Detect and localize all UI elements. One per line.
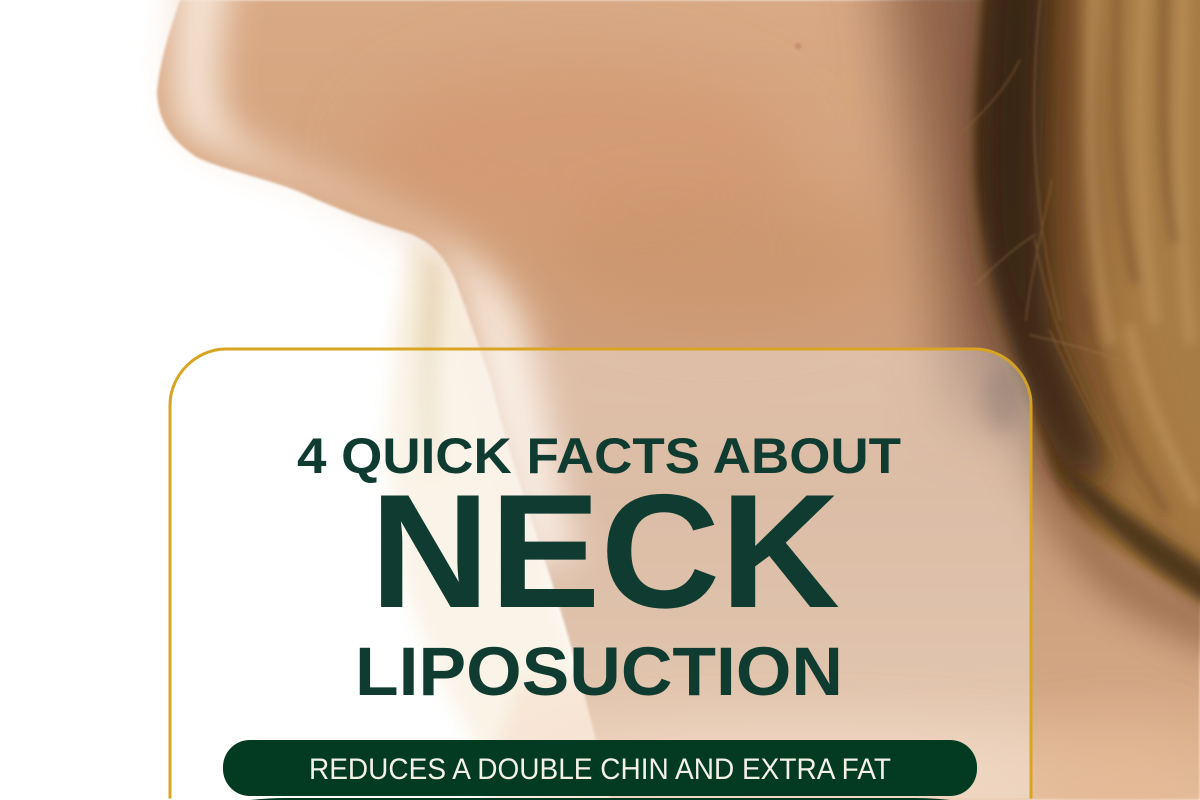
hair mass <box>975 0 1200 625</box>
panel background and gold border <box>170 349 1031 798</box>
lit jaw edge <box>172 0 575 560</box>
fact pill: reduces a double chin <box>223 740 977 796</box>
hair strands soft <box>1063 0 1195 510</box>
small skin mark <box>795 43 801 49</box>
next fact pill, cropped <box>250 798 950 800</box>
heading: 4 quick facts about: 4 QUICK FACTS ABOUT <box>297 428 901 484</box>
hair strands fine <box>960 0 1170 530</box>
shadow under hair <box>1025 410 1200 640</box>
hair underside shadow <box>1050 455 1200 625</box>
dark hair root shading <box>983 0 1110 480</box>
heading: neck: NECK <box>370 461 840 642</box>
hair glow seen through panel <box>983 368 1023 432</box>
fact pill: reduces a double chin: REDUCES A DOUBLE CHIN AND EXTRA FAT <box>309 753 891 786</box>
heading: liposuction: LIPOSUCTION <box>355 633 843 710</box>
blonde hair behind the neck <box>385 235 640 800</box>
hair body colour <box>1085 0 1200 540</box>
panel: title card <box>170 349 1031 800</box>
warm neck shading <box>360 0 1200 800</box>
